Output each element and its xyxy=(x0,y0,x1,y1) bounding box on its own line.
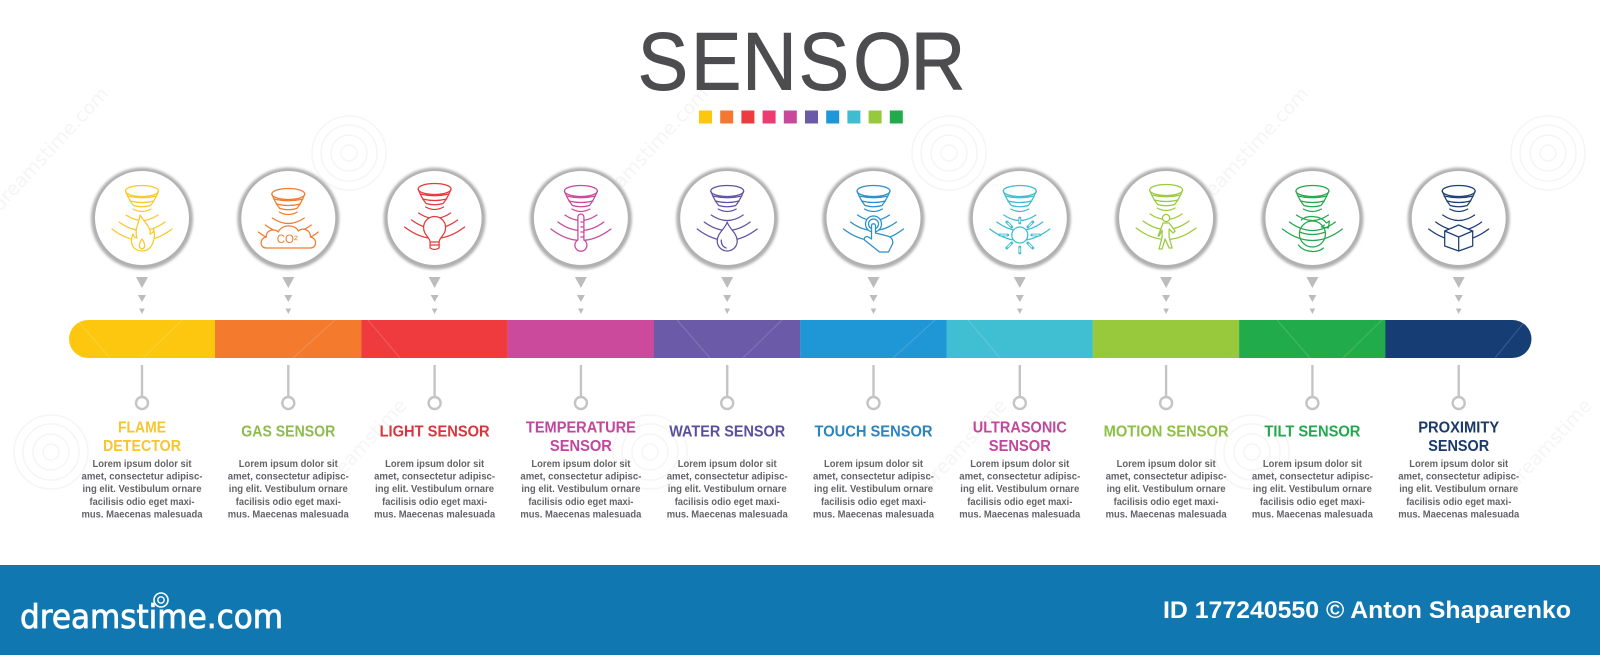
body text: mus. Maecenas malesuada xyxy=(1398,509,1520,520)
icon: gas sensor xyxy=(237,168,339,270)
logo: dreamstime.com: dreamstime.com xyxy=(20,597,283,636)
heading: SENSOR xyxy=(989,438,1051,455)
footer band xyxy=(0,565,1600,655)
body text: ing elit. Vestibulum ornare xyxy=(229,484,348,495)
pointer arrows xyxy=(1453,277,1465,314)
connector xyxy=(429,365,441,409)
heading: LIGHT SENSOR xyxy=(380,424,490,441)
body text: Lorem ipsum dolor sit xyxy=(385,459,485,470)
body text: mus. Maecenas malesuada xyxy=(1106,509,1227,520)
heading: ULTRASONIC xyxy=(973,420,1067,437)
body text: mus. Maecenas malesuada xyxy=(520,509,642,520)
body text: mus. Maecenas malesuada xyxy=(667,509,788,520)
body text: facilisis odio eget maxi- xyxy=(236,497,341,508)
timeline bar xyxy=(69,320,1532,358)
heading: TOUCH SENSOR xyxy=(814,424,933,441)
panel: motion sensor xyxy=(1104,168,1229,520)
panel: temperature sensor xyxy=(520,168,642,520)
body text: ing elit. Vestibulum ornare xyxy=(1253,484,1372,495)
body text: ing elit. Vestibulum ornare xyxy=(1107,484,1226,495)
body text: Lorem ipsum dolor sit xyxy=(970,459,1070,470)
watermark: dreamstime.com xyxy=(588,83,713,215)
pointer arrows xyxy=(575,277,587,314)
body text: Lorem ipsum dolor sit xyxy=(1409,459,1509,470)
body text: mus. Maecenas malesuada xyxy=(959,509,1081,520)
pointer arrows xyxy=(282,277,294,314)
body text: amet, consectetur adipisc- xyxy=(1252,472,1373,483)
body text: amet, consectetur adipisc- xyxy=(374,472,495,483)
panel: ultrasonic sensor xyxy=(959,168,1081,520)
body text: amet, consectetur adipisc- xyxy=(82,472,202,483)
body text: ing elit. Vestibulum ornare xyxy=(1399,484,1519,495)
heading: GAS SENSOR xyxy=(241,424,336,441)
panel: flame detector xyxy=(82,168,203,520)
icon: temperature sensor xyxy=(530,168,632,270)
icon: ultrasonic sensor xyxy=(969,168,1071,270)
heading: DETECTOR xyxy=(103,438,181,455)
watermark: dreamstime.com xyxy=(1188,83,1313,215)
body text: facilisis odio eget maxi- xyxy=(382,497,487,508)
body text: Lorem ipsum dolor sit xyxy=(239,459,338,470)
pointer arrows xyxy=(1014,277,1026,314)
heading: SENSOR xyxy=(550,438,612,455)
body text: ing elit. Vestibulum ornare xyxy=(814,484,933,495)
panel: gas sensor xyxy=(228,168,349,520)
image id and credit: ID 177240550 © Anton Shaparenko xyxy=(1163,597,1571,624)
connector xyxy=(1453,365,1465,409)
body text: facilisis odio eget maxi- xyxy=(1260,497,1365,508)
body text: mus. Maecenas malesuada xyxy=(1252,509,1373,520)
body text: ing elit. Vestibulum ornare xyxy=(375,484,494,495)
heading: SENSOR xyxy=(1428,438,1490,455)
body text: Lorem ipsum dolor sit xyxy=(824,459,924,470)
title: SENSOR xyxy=(638,16,965,107)
heading: PROXIMITY xyxy=(1418,420,1499,437)
body text: facilisis odio eget maxi- xyxy=(675,497,780,508)
body text: facilisis odio eget maxi- xyxy=(528,497,633,508)
pointer arrows xyxy=(868,277,880,314)
heading: MOTION SENSOR xyxy=(1104,424,1229,441)
icon: motion sensor xyxy=(1115,168,1217,270)
connector xyxy=(721,365,733,409)
body text: amet, consectetur adipisc- xyxy=(1398,472,1519,483)
icon: water sensor xyxy=(676,168,778,270)
body text: Lorem ipsum dolor sit xyxy=(92,459,192,470)
body text: amet, consectetur adipisc- xyxy=(1106,472,1227,483)
body text: facilisis odio eget maxi- xyxy=(821,497,926,508)
panel: light sensor xyxy=(374,168,495,520)
body text: ing elit. Vestibulum ornare xyxy=(668,484,787,495)
body text: mus. Maecenas malesuada xyxy=(228,509,349,520)
body text: mus. Maecenas malesuada xyxy=(374,509,495,520)
heading: FLAME xyxy=(118,420,166,437)
watermark: dreamstime xyxy=(1503,395,1596,493)
icon: flame sensor xyxy=(91,168,193,270)
body text: ing elit. Vestibulum ornare xyxy=(521,484,641,495)
panel: touch sensor xyxy=(813,168,934,520)
connector xyxy=(575,365,587,409)
connector xyxy=(1306,365,1318,409)
body text: facilisis odio eget maxi- xyxy=(1406,497,1511,508)
icon: light sensor xyxy=(384,168,486,270)
body text: facilisis odio eget maxi- xyxy=(1114,497,1219,508)
body text: Lorem ipsum dolor sit xyxy=(1263,459,1362,470)
body text: amet, consectetur adipisc- xyxy=(520,472,641,483)
icon: proximity sensor xyxy=(1408,168,1510,270)
watermark xyxy=(0,83,1596,493)
connector xyxy=(868,365,880,409)
watermark: dreamstime xyxy=(318,395,411,493)
watermark: dreamstime xyxy=(918,395,1011,493)
body text: Lorem ipsum dolor sit xyxy=(1117,459,1216,470)
body text: ing elit. Vestibulum ornare xyxy=(82,484,202,495)
body text: Lorem ipsum dolor sit xyxy=(531,459,631,470)
pointer arrows xyxy=(1160,277,1172,314)
panel: proximity sensor xyxy=(1398,168,1520,520)
pointer arrows xyxy=(721,277,733,314)
icon: tilt sensor xyxy=(1261,168,1363,270)
panel: water sensor xyxy=(667,168,788,520)
pointer arrows xyxy=(1306,277,1318,314)
body text: Lorem ipsum dolor sit xyxy=(678,459,777,470)
body text: mus. Maecenas malesuada xyxy=(82,509,203,520)
heading: TEMPERATURE xyxy=(526,420,636,437)
pointer arrows xyxy=(429,277,441,314)
body text: amet, consectetur adipisc- xyxy=(228,472,349,483)
connector xyxy=(1160,365,1172,409)
body text: mus. Maecenas malesuada xyxy=(813,509,934,520)
panel: tilt sensor xyxy=(1252,168,1373,520)
pointer arrows xyxy=(136,277,148,314)
body text: amet, consectetur adipisc- xyxy=(813,472,934,483)
icon: touch sensor xyxy=(822,168,924,270)
body text: ing elit. Vestibulum ornare xyxy=(960,484,1080,495)
icon: gas sensor: CO² xyxy=(277,234,298,246)
body text: amet, consectetur adipisc- xyxy=(959,472,1080,483)
body text: facilisis odio eget maxi- xyxy=(90,497,194,508)
colour squares xyxy=(699,110,903,124)
connector xyxy=(136,365,148,409)
body text: amet, consectetur adipisc- xyxy=(667,472,788,483)
heading: WATER SENSOR xyxy=(669,424,786,441)
connector xyxy=(282,365,294,409)
heading: TILT SENSOR xyxy=(1264,424,1361,441)
body text: facilisis odio eget maxi- xyxy=(967,497,1072,508)
connector xyxy=(1014,365,1026,409)
